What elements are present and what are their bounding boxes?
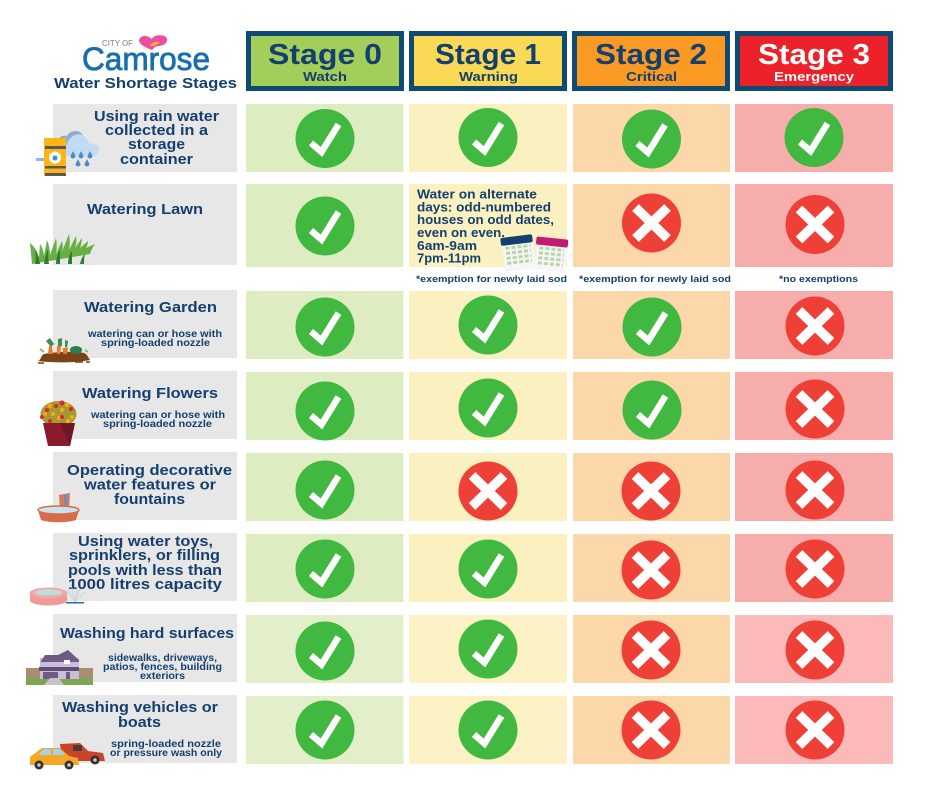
row label	[53, 695, 237, 763]
row label: Using rain water	[94, 108, 219, 125]
cell: Stage 1 schedule: 7pm-11pm	[417, 252, 481, 266]
cell: Stage 3 prohibited	[735, 184, 893, 267]
row: washing vehicles	[30, 695, 893, 770]
icon: paddling pool and sprinkler	[30, 588, 85, 606]
header: Stage 2: Stage 2	[595, 39, 707, 71]
header: Stage 1: Stage 1	[435, 39, 541, 71]
row label	[53, 371, 237, 439]
row label: spring-loaded nozzle	[101, 338, 210, 349]
row label	[53, 452, 237, 520]
icon: house	[26, 650, 93, 685]
cell: Stage 0 allowed	[246, 104, 404, 172]
row label: fountains	[114, 491, 185, 508]
logo: City of Camrose: CITY OF	[102, 39, 133, 48]
row: rain water	[36, 104, 893, 176]
row label	[53, 290, 237, 358]
cell: Stage 1 allowed	[409, 615, 567, 683]
cell: Stage 3 prohibited	[735, 696, 893, 764]
header: Stage 0	[248, 34, 402, 88]
cell: Stage 1 schedule: even on even.	[417, 226, 505, 240]
row label: pools with less than	[68, 562, 222, 579]
title: Water Shortage Stages	[54, 75, 237, 92]
cell: Stage 1 allowed	[409, 291, 567, 359]
cell: Stage 3 prohibited	[735, 534, 893, 602]
cell: Stage 2 prohibited	[573, 184, 730, 267]
header: Stage 1	[412, 34, 564, 88]
header: Stage 1: Warning	[459, 69, 518, 84]
cell: Stage 1 prohibited	[409, 453, 567, 521]
icon: vegetable garden	[38, 338, 90, 363]
row: washing hard surfaces	[26, 614, 893, 685]
row label	[53, 184, 237, 265]
row: water toys and pools	[30, 533, 893, 606]
cell: Stage 3 prohibited	[735, 453, 893, 521]
row label: watering can or hose with	[87, 329, 222, 340]
header: Stage 0: Watch	[303, 69, 347, 84]
row label: exteriors	[140, 671, 185, 682]
cell: Stage 1 allowed	[409, 696, 567, 764]
row label: Operating decorative	[67, 462, 232, 479]
icon: potted flowers	[40, 400, 76, 446]
row label: Watering Flowers	[82, 385, 218, 402]
row label: water features or	[83, 476, 216, 494]
cell: Stage 0 allowed	[246, 372, 404, 440]
row label: Watering Lawn	[87, 201, 203, 218]
cell: Stage 2 prohibited	[573, 696, 730, 764]
cell: Stage 0 allowed	[246, 696, 404, 764]
cell: Stage 3 prohibited	[735, 372, 893, 440]
row label	[53, 104, 237, 172]
row label: Washing hard surfaces	[60, 625, 234, 642]
header: Stage 3: Stage 3	[758, 39, 870, 71]
header: Stage 3: Emergency	[774, 69, 855, 84]
cell: Stage 3 prohibited	[735, 615, 893, 683]
cell: Stage 1 schedule: days: odd-numbered	[417, 200, 551, 214]
note: Stage 3 no exemptions: *no exemptions	[779, 274, 858, 284]
icon: truck and car	[30, 743, 105, 770]
cell: Stage 0 allowed	[246, 615, 404, 683]
row label: boats	[118, 714, 161, 731]
row label: Using water toys,	[78, 533, 213, 550]
row: watering garden	[38, 290, 893, 363]
header: Stage 2	[574, 34, 728, 88]
cell: Stage 1 schedule: 6am-9am	[417, 239, 477, 253]
row label: Watering Garden	[84, 299, 217, 316]
cell: Stage 1 allowed	[409, 372, 567, 440]
row label: or pressure wash only	[110, 748, 222, 759]
row: watering flowers	[40, 371, 893, 446]
row: watering lawn	[30, 184, 893, 284]
cell: Stage 2 allowed	[573, 291, 730, 359]
row label: sidewalks, driveways,	[108, 653, 217, 664]
row label: collected in a	[105, 122, 209, 139]
row label: storage	[128, 136, 185, 153]
row label: Washing vehicles or	[62, 699, 218, 716]
header: Stage 0: Stage 0	[268, 39, 382, 71]
cell: Stage 2 prohibited	[573, 615, 730, 683]
cell: Stage 1 allowed	[409, 104, 567, 172]
icon: grass	[30, 234, 95, 264]
cell: Stage 2 prohibited	[573, 534, 730, 602]
row: decorative water features	[38, 452, 893, 522]
cell: Stage 1 allowed	[409, 534, 567, 602]
cell: Stage 1 schedule	[409, 184, 567, 267]
row label: sprinklers, or filling	[69, 547, 220, 564]
cell: Stage 0 allowed	[246, 453, 404, 521]
row label: patios, fences, building	[103, 662, 222, 673]
header: Stage 3	[738, 34, 890, 88]
row label: watering can or hose with	[90, 410, 225, 421]
icon: fountain	[38, 493, 79, 522]
cell: Stage 2 allowed	[573, 372, 730, 440]
row label: spring-loaded nozzle	[111, 739, 221, 750]
icon: rain barrel and cloud	[36, 131, 99, 176]
cell: Stage 0 allowed	[246, 534, 404, 602]
row label: container	[120, 151, 193, 168]
cell: Stage 0 allowed	[246, 184, 404, 267]
cell: Stage 2 prohibited	[573, 453, 730, 521]
cell: Stage 3 allowed	[735, 104, 893, 172]
header: Stage 2: Critical	[626, 69, 677, 84]
logo: City of Camrose: Camrose	[82, 41, 210, 77]
row label: 1000 litres capacity	[68, 576, 223, 593]
note: Stage 1 exemption: *exemption for newly laid sod	[416, 274, 567, 284]
note: Stage 2 exemption: *exemption for newly laid sod	[579, 274, 731, 284]
cell: Stage 1 schedule: Water on alternate	[417, 188, 537, 202]
row label	[53, 533, 237, 601]
cell: Stage 2 allowed	[573, 104, 730, 172]
cell: Stage 0 allowed	[246, 291, 404, 359]
cell: Stage 1 schedule: houses on odd dates,	[417, 213, 554, 227]
cell: Stage 3 prohibited	[735, 291, 893, 359]
row label	[53, 614, 237, 682]
row label: spring-loaded nozzle	[103, 419, 212, 430]
icon: calendars	[500, 234, 568, 273]
